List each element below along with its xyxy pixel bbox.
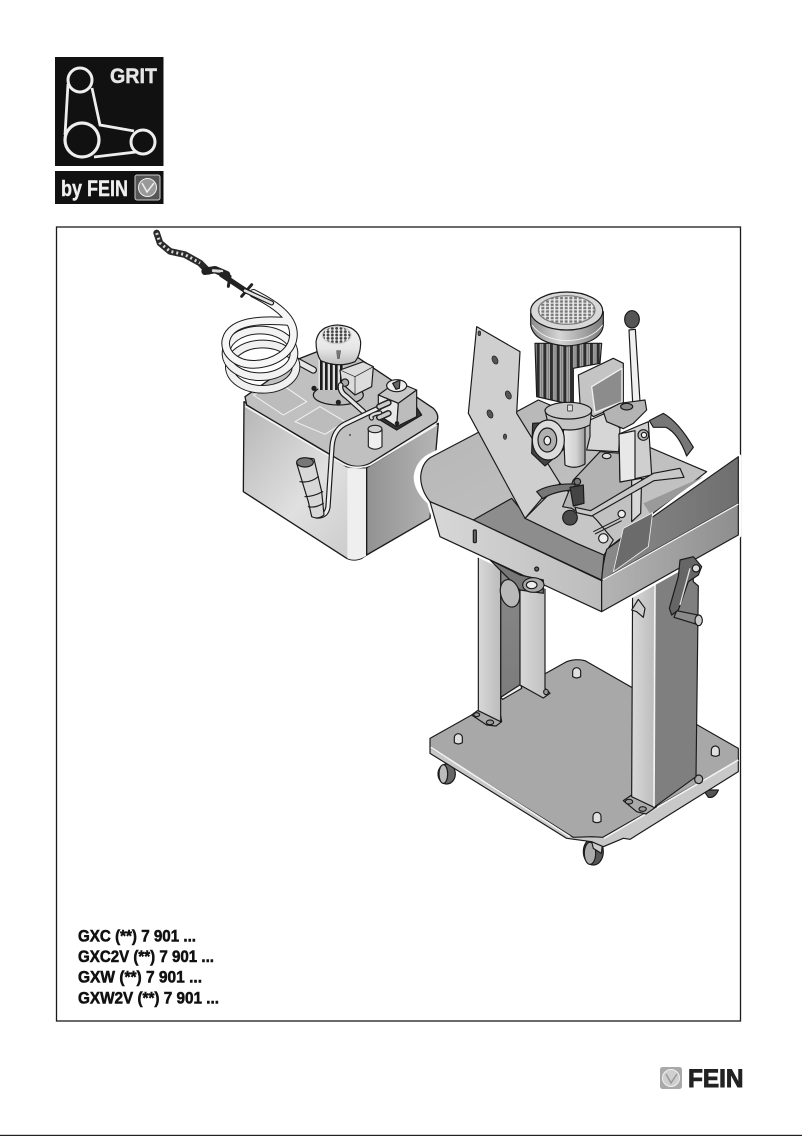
- left leg assembly: [472, 553, 550, 726]
- bowl white halo: [417, 400, 738, 612]
- base plate: [430, 660, 738, 847]
- model numbers: GXW (**) 7 901 ...: [78, 968, 202, 986]
- bowl interior: [421, 400, 707, 555]
- logo: black belt panel: [55, 57, 164, 166]
- bowl front-left wall: [430, 502, 602, 612]
- logo: by FEIN strip: [55, 171, 164, 204]
- mounting plate: [563, 452, 652, 514]
- column: [603, 400, 652, 522]
- bowl front-right wall: [602, 503, 738, 612]
- illustration frame: [56, 227, 740, 1021]
- filler cap: [368, 425, 382, 449]
- gearbox body: [532, 402, 620, 467]
- icon: FEIN emblem, small: [135, 175, 160, 200]
- pump motor: [312, 325, 373, 405]
- guard plate: [613, 513, 653, 572]
- mains plug: [297, 458, 324, 518]
- front left caster: [438, 764, 455, 784]
- angled bracket plate: [468, 327, 560, 518]
- bowl rear guard: [602, 457, 738, 581]
- tank top label plates: [253, 383, 345, 434]
- model numbers: GXW2V (**) 7 901 ...: [78, 988, 219, 1008]
- base cap nuts: [454, 668, 719, 823]
- icon: belt drive with three pulleys: [65, 68, 155, 157]
- coiled coolant hose: [226, 293, 313, 389]
- rear caster: [703, 790, 718, 797]
- bowl edge highlight: [603, 504, 738, 580]
- crank handle: [632, 557, 702, 626]
- model numbers: GXC (**) 7 901 ...: [78, 926, 196, 946]
- clamp lever left: [537, 478, 584, 525]
- bottom rule: [0, 1135, 802, 1136]
- model numbers: GXC2V (**) 7 901 ...: [78, 947, 214, 966]
- logo wordmark: GRIT: GRIT: [110, 65, 157, 88]
- segmented nozzle hose: [157, 233, 272, 303]
- lever with black ball knob: [625, 311, 640, 403]
- clamp lever right: [649, 413, 693, 456]
- guide bar and handle: [575, 468, 684, 543]
- coolant unit illustration: [157, 233, 438, 560]
- bowl slot and hole: [473, 530, 539, 571]
- FEIN logo: [660, 1065, 744, 1093]
- model numbers: [78, 926, 219, 1008]
- logo wordmark: by FEIN: by FEIN: [61, 176, 128, 201]
- bowl right recess: [643, 477, 703, 513]
- tilt handwheel knob: [490, 560, 544, 609]
- bowl inner floor, dark: [473, 498, 604, 580]
- grinding machine top: [417, 292, 738, 612]
- front caster: [583, 837, 603, 865]
- switch box: [377, 380, 422, 430]
- wordmark: FEIN: FEIN: [688, 1065, 744, 1093]
- right leg assembly: [623, 557, 703, 814]
- tank body: [243, 346, 438, 560]
- coolant pipes: [317, 385, 388, 516]
- bowl inner floor, light: [525, 483, 613, 555]
- icon: FEIN emblem: [660, 1067, 682, 1089]
- stand with base and legs: [430, 553, 738, 865]
- clamp mechanism: [532, 400, 693, 543]
- GRIT by FEIN logo: [55, 57, 164, 204]
- main motor: [531, 292, 623, 417]
